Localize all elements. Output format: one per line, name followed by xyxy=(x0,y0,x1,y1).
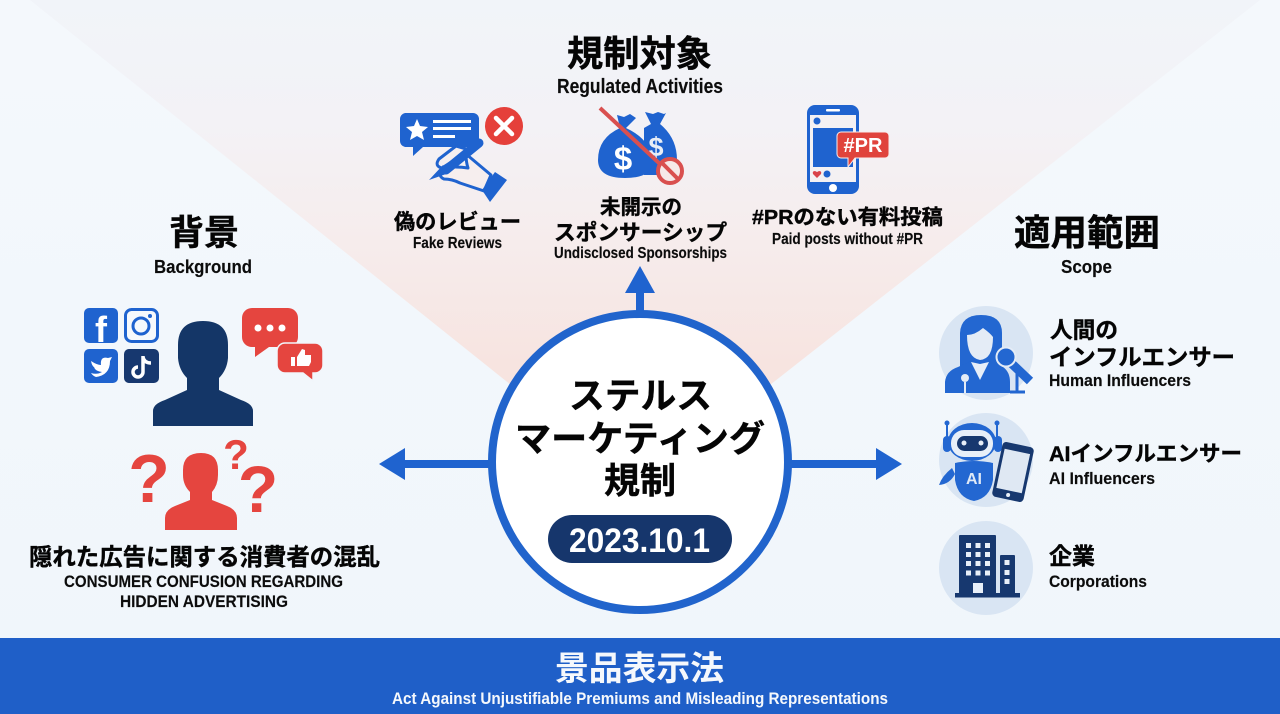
heading: regulated activities: 規制対象 xyxy=(567,33,712,74)
panel: background xyxy=(29,214,380,611)
icon: phone with PR tag: #PR xyxy=(844,135,883,157)
panel: regulated activities xyxy=(394,33,943,262)
text: human influencers xyxy=(1049,318,1235,390)
text: consumer confusion: HIDDEN ADVERTISING xyxy=(120,592,288,611)
text: undisclosed sponsorships: Undisclosed Sponsorships xyxy=(554,245,727,262)
icon: corporate building xyxy=(939,521,1033,615)
icon: phone with PR tag xyxy=(807,105,889,194)
text: consumer confusion xyxy=(29,544,380,611)
title: stealth marketing regulation: マーケティング xyxy=(515,418,765,459)
text: AI influencers xyxy=(1049,442,1242,488)
heading: background: 背景 xyxy=(169,214,239,253)
footer subtitle: Act Against Unjustifiable Premiums and Misleading Representations xyxy=(392,689,888,708)
text: human influencers: 人間の xyxy=(1050,318,1118,343)
panel: regulated activities wedge xyxy=(30,0,1260,486)
text: consumer confusion: 隠れた広告に関する消費者の混乱 xyxy=(29,544,380,570)
text: consumer confusion: CONSUMER CONFUSION REGARDING xyxy=(64,572,343,591)
footer title: 景品表示法 xyxy=(555,651,724,688)
icon: chat and like bubbles xyxy=(242,308,323,381)
icon: social media grid: f xyxy=(95,309,108,350)
icon: undisclosed money bags: $ xyxy=(614,140,632,177)
icon: human influencer xyxy=(939,306,1033,400)
text: paid posts without PR: Paid posts without #PR xyxy=(772,231,923,248)
date pill xyxy=(548,515,732,563)
text: human influencers: インフルエンサー xyxy=(1049,344,1235,370)
center circle xyxy=(492,314,788,610)
text: undisclosed sponsorships: スポンサーシップ xyxy=(554,221,727,245)
text: paid posts without PR: #PRのない有料投稿 xyxy=(752,206,943,229)
text: corporations xyxy=(1049,543,1147,591)
text: paid posts without PR xyxy=(752,206,943,248)
text: undisclosed sponsorships: 未開示の xyxy=(600,196,682,219)
text: AI influencers: AIインフルエンサー xyxy=(1049,442,1242,466)
icon: undisclosed money bags: $ xyxy=(648,132,664,162)
heading: scope xyxy=(1014,212,1160,277)
footer band xyxy=(0,638,1280,714)
text: undisclosed sponsorships xyxy=(554,196,727,262)
heading: background: Background xyxy=(154,257,252,277)
text: human influencers: Human Influencers xyxy=(1049,371,1191,390)
arrow: up xyxy=(625,266,655,312)
heading: regulated activities: Regulated Activities xyxy=(557,76,723,98)
icon: AI influencer robot: AI xyxy=(966,471,982,488)
title: stealth marketing regulation: ステルス xyxy=(569,375,712,416)
panel: scope xyxy=(939,212,1242,615)
icon: AI influencer robot xyxy=(939,413,1034,507)
heading: scope: 適用範囲 xyxy=(1014,212,1160,253)
title: stealth marketing regulation xyxy=(515,375,765,501)
icon: confused red person: ? xyxy=(238,452,278,526)
icon: confused red person: ? xyxy=(223,431,249,478)
icon: confused red person xyxy=(128,431,278,530)
text: AI influencers: AI Influencers xyxy=(1049,469,1155,488)
heading: scope: Scope xyxy=(1061,257,1112,277)
icon: undisclosed money bags xyxy=(598,108,682,183)
text: fake reviews: 偽のレビュー xyxy=(394,211,521,234)
date pill: 2023.10.1 xyxy=(569,522,710,560)
arrow: left xyxy=(379,448,492,480)
icon: social media grid xyxy=(84,308,159,383)
icon: fake review xyxy=(400,107,523,202)
icon: navy person xyxy=(153,321,253,426)
heading: background xyxy=(154,214,252,277)
text: fake reviews: Fake Reviews xyxy=(413,235,502,252)
icon: confused red person: ? xyxy=(128,441,170,517)
text: fake reviews xyxy=(394,211,521,252)
heading: regulated activities xyxy=(557,33,723,98)
text: corporations: Corporations xyxy=(1049,572,1147,591)
text: corporations: 企業 xyxy=(1049,543,1095,569)
title: stealth marketing regulation: 規制 xyxy=(604,460,676,501)
arrow: right xyxy=(788,448,902,480)
